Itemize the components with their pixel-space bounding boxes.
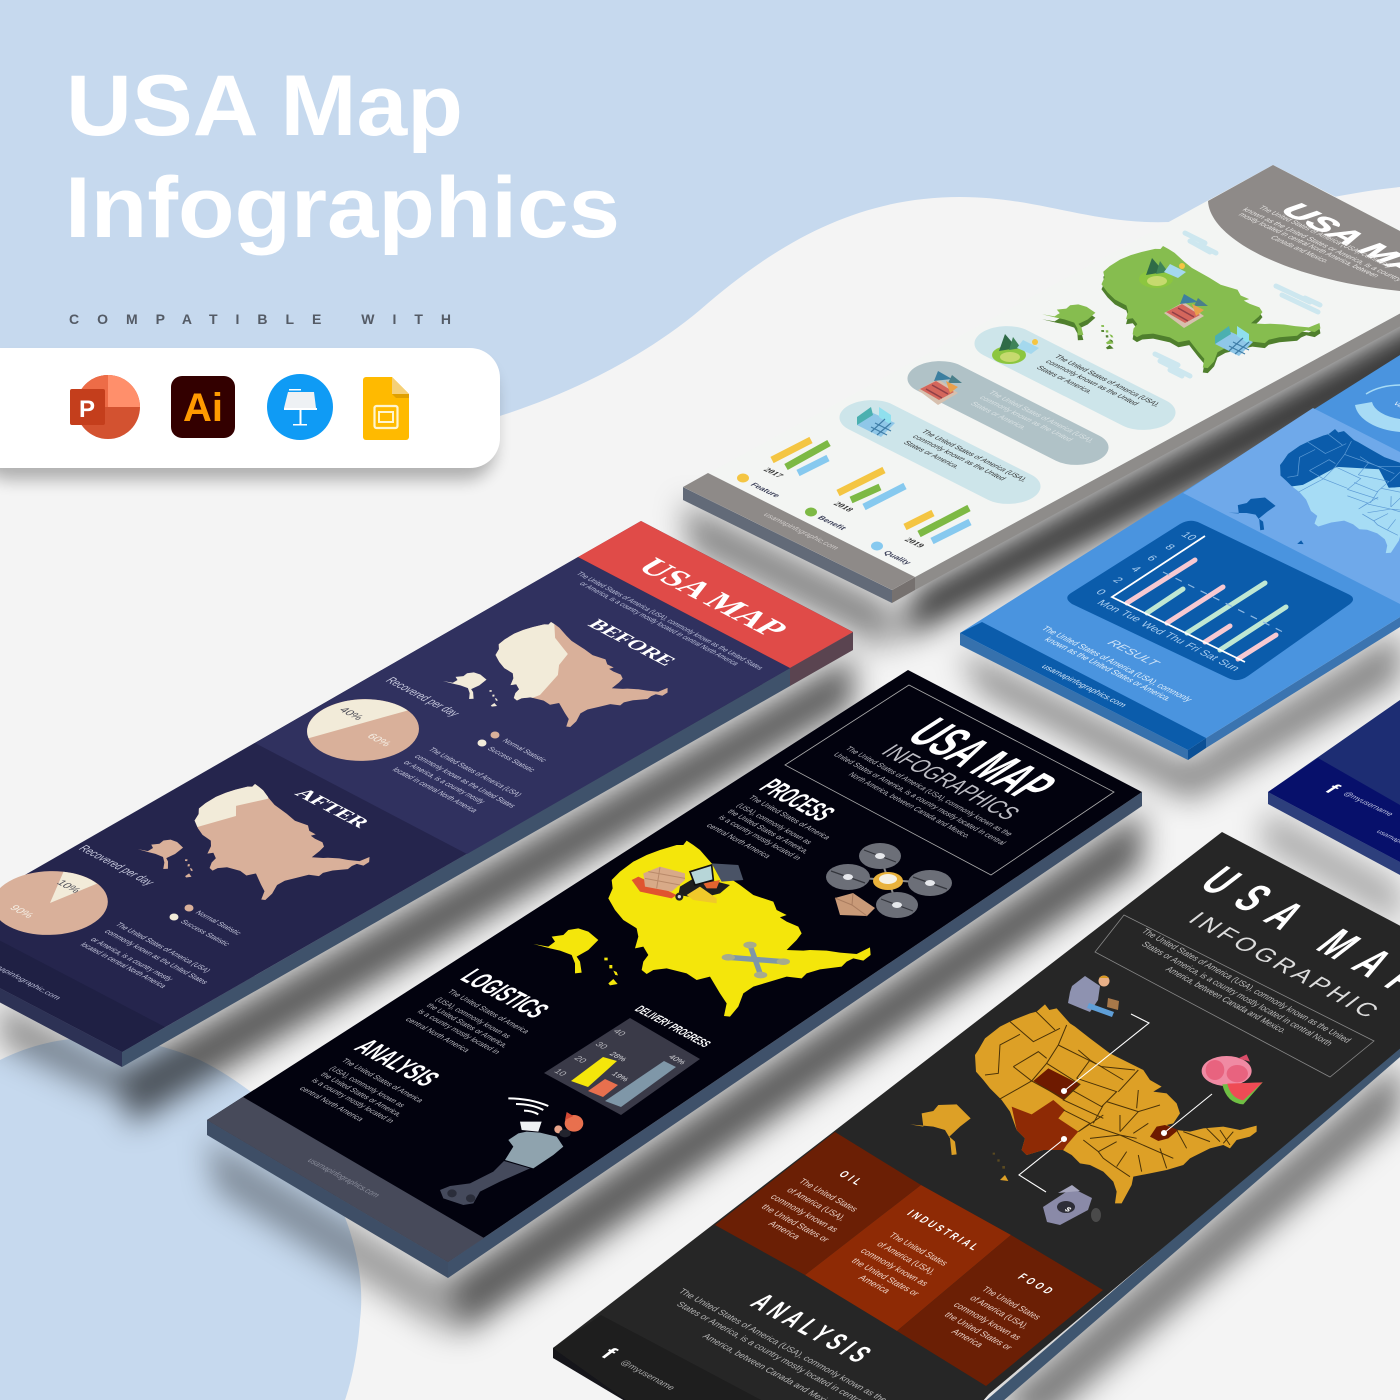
panel: industrial: INDUSTRIAL [904, 1209, 983, 1254]
panel: software icons [0, 348, 500, 468]
intro: United States or America, is a country mostly located in central [831, 751, 1009, 846]
panel: oil: OIL [835, 1170, 867, 1189]
icon: PowerPoint [70, 375, 140, 439]
text: after description: The United States of America (USA) [113, 921, 213, 974]
chart caption: RESULT [1104, 638, 1164, 669]
pill: first feature: The United States of America (USA), [1052, 354, 1163, 408]
icon: worker [1068, 976, 1119, 1017]
text: analysis: the United States or America, [318, 1071, 405, 1118]
bars [1127, 560, 1286, 659]
text: analysis: central North America [297, 1085, 367, 1123]
panel: industrial: the United States or [849, 1257, 921, 1298]
text: logistics: (USA), commonly known as [433, 996, 514, 1040]
bar chart: delivery: 10 [552, 1067, 569, 1077]
intro: The United States of America (USA), commonly known as the United [1139, 927, 1353, 1045]
bar chart: delivery: 19% [609, 1070, 631, 1083]
intro [574, 571, 765, 671]
background: blue blob [0, 1038, 361, 1400]
map: green USA [1037, 243, 1324, 376]
pie chart: before [284, 686, 442, 774]
text: process: The United States of America [746, 794, 833, 841]
text: analysis: The United States of America [339, 1057, 426, 1104]
subtitle: INFOGRAPHIC [1182, 908, 1384, 1022]
axis labels: Wed [1137, 620, 1168, 637]
icon: drone [826, 843, 952, 918]
panel: before and after sheet [0, 521, 853, 1067]
axis labels: 6 [1144, 554, 1159, 563]
intro [831, 745, 1016, 846]
bar chart: yearly: 2019 [902, 536, 928, 549]
text: process: (USA), commonly known as [734, 802, 815, 846]
text: logistics: central North America [403, 1016, 473, 1054]
text: before description: commonly known as the United States [412, 753, 518, 809]
axis labels [1093, 531, 1242, 673]
text: before description: The United States of America (USA) [426, 746, 525, 798]
text: after description: located in central North America [78, 941, 170, 989]
footer url: usamapinfographics.com [1039, 663, 1129, 709]
pill: first feature: commonly known as the United [1043, 359, 1141, 407]
pill: first feature [962, 319, 1188, 437]
legend: chart: Quality [881, 550, 914, 566]
text: after description: or America, is a country mostly [88, 936, 176, 983]
icon: pomegranate and watermelon [1202, 1054, 1263, 1104]
text: logistics: is a country mostly located in [415, 1008, 503, 1055]
subtitle: compatible with: COMPATIBLE WITH [69, 311, 451, 327]
footer band [683, 473, 915, 590]
pill: second feature: The United States of America (USA), [986, 390, 1097, 444]
map: blue USA [1229, 429, 1400, 554]
bar chart: delivery [544, 1018, 700, 1115]
icon: forklift and pallet [632, 863, 743, 903]
intro: The United States of America (USA), commonly known as the United States [574, 571, 765, 671]
header title: USA MAP [629, 554, 796, 643]
axis labels: Sun [1215, 658, 1242, 673]
heading: analysis: ANALYSIS [347, 1035, 446, 1091]
subtitle: INFOGRAPHICS [875, 741, 1025, 824]
intro: States or America, is a country mostly located in central North [1139, 940, 1335, 1048]
axis labels: 2 [1110, 576, 1125, 585]
legend: after: Success Statistic [178, 919, 232, 947]
bar chart: yearly: 2017 [761, 466, 787, 479]
bar chart: yearly [761, 440, 970, 549]
icon: oil can [1043, 1185, 1101, 1225]
panel: green light infographic sheet [683, 165, 1400, 603]
panel: food: America [949, 1328, 986, 1350]
leader lines [1019, 1014, 1212, 1192]
description: The United States of America (USA), commonly [1038, 625, 1195, 704]
panel: food: commonly known as [951, 1301, 1024, 1342]
bar chart: delivery: 40% [666, 1053, 688, 1066]
description: known as the United States or America. [1041, 636, 1174, 703]
bar chart: delivery: 30 [593, 1040, 610, 1050]
pie chart: after: 10% [53, 879, 83, 895]
text: process: central North America [704, 822, 774, 860]
map: states USA [910, 1004, 1257, 1203]
footer url: usamapinfographics.com [305, 1157, 382, 1199]
text: process: is a country mostly located in [716, 814, 804, 861]
map: before [439, 620, 674, 729]
bar chart: yearly: 2018 [831, 500, 857, 513]
pill: second feature: States or America. [968, 401, 1029, 431]
pie chart: before: 60% [364, 732, 394, 748]
heading: process: PROCESS [752, 775, 841, 826]
panel: food: the United States or [942, 1311, 1014, 1352]
axis labels: 10 [1178, 531, 1199, 542]
text: logistics: the United States or America, [424, 1002, 511, 1049]
panel: oil: the United States or [759, 1203, 831, 1244]
icon: PowerPoint: P [79, 396, 95, 423]
panel: oil: commonly known as [768, 1193, 841, 1234]
icon: Keynote [267, 374, 333, 440]
text: logistics: The United States of America [445, 988, 532, 1035]
text: before description: located in central North America [390, 766, 481, 814]
text: analysis: is a country mostly located in [309, 1077, 397, 1124]
map icons [1139, 258, 1253, 356]
panel: food: of America (USA), [967, 1294, 1031, 1331]
panel: charcoal industry sheet [553, 832, 1400, 1400]
header: red [578, 521, 853, 668]
bar chart: delivery: 20 [572, 1054, 589, 1064]
panel: industrial: of America (USA), [874, 1240, 938, 1277]
footer band [207, 1097, 484, 1262]
panel: oil: The United States [796, 1177, 860, 1214]
icon: Google Slides [363, 377, 409, 440]
title: USA MAP [894, 710, 1069, 810]
panel: black logistics sheet [207, 670, 1142, 1278]
icon: person with tablet [440, 1098, 583, 1205]
donut chart [1355, 385, 1400, 432]
pill: third feature: States or America. [901, 440, 962, 470]
footer band [1268, 758, 1400, 862]
panel: food: FOOD [1014, 1272, 1058, 1298]
panel: oil: of America (USA), [784, 1186, 848, 1223]
panel: food [897, 1235, 1103, 1386]
intro: America, between Canada and Mexico. [1163, 965, 1289, 1035]
legend: before: Success Statistic [485, 746, 537, 773]
icon: oil can: $ [1062, 1206, 1074, 1214]
icon: Illustrator: Ai [183, 386, 223, 430]
title [65, 58, 620, 256]
pie chart: before: 40% [336, 706, 366, 722]
footer band [0, 916, 165, 1052]
axis labels: 0 [1093, 588, 1108, 597]
panel: oil: America [766, 1220, 803, 1242]
title frame [785, 685, 1114, 875]
intro frame [1095, 915, 1374, 1077]
text: analysis: (USA), commonly known as [327, 1065, 408, 1109]
axis labels: Thu [1161, 631, 1188, 646]
section: before [255, 557, 790, 854]
legend: before [478, 732, 549, 773]
social handle: @myusername [1341, 790, 1396, 818]
legend: before: Normal Statistic [500, 738, 549, 763]
panel: industrial: commonly known as [858, 1247, 931, 1288]
icon: facebook: f [1320, 782, 1344, 797]
legend: chart: Benefit [815, 515, 849, 531]
heading: logistics: LOGISTICS [453, 965, 556, 1023]
header description: Canada and Mexico. [1268, 235, 1332, 264]
text: after description [78, 921, 213, 989]
header shape [1208, 165, 1400, 291]
text: after description: commonly known as the United States [102, 928, 211, 985]
icon: Illustrator [171, 376, 235, 438]
heading: before: BEFORE [583, 617, 681, 669]
band: footer [960, 622, 1206, 750]
pill: second feature: commonly known as the United [977, 395, 1075, 443]
panel: blue infographic sheet [960, 355, 1400, 760]
pill: third feature [827, 393, 1053, 511]
text: process [704, 794, 833, 861]
intro: The United States of America (USA), commonly known as the [843, 745, 1016, 838]
panel: industrial [805, 1185, 1011, 1331]
title: USA Map [66, 58, 463, 154]
axis labels: Sat [1196, 649, 1221, 662]
axis labels: 8 [1162, 543, 1177, 552]
panel shadow [0, 362, 495, 480]
heading: after: AFTER [290, 786, 375, 831]
pill: third feature: commonly known as the United [910, 434, 1008, 482]
bar chart: delivery: 40 [611, 1027, 628, 1037]
icon: facebook: f [596, 1344, 623, 1363]
panel: oil [715, 1132, 921, 1275]
label: recovered per day: Recovered per day [382, 675, 464, 718]
axis labels: Mon [1094, 598, 1123, 614]
panel: food: The United States [979, 1285, 1043, 1322]
icon: small drone on map [722, 942, 790, 978]
pie chart: after: 90% [6, 904, 36, 920]
map: yellow USA [533, 841, 871, 1017]
pill: second feature [895, 354, 1121, 472]
legend: chart [737, 474, 914, 566]
intro: North America, between Canada and Mexico. [846, 771, 974, 840]
text: logistics [403, 988, 532, 1055]
band: map section [1183, 408, 1400, 604]
decorative clouds [1155, 233, 1320, 376]
social handle: @myusername [618, 1358, 677, 1392]
bar chart: delivery: 28% [607, 1050, 629, 1063]
legend: after [170, 904, 244, 947]
text: before description [390, 746, 525, 814]
pill: first feature: States or America. [1034, 365, 1095, 395]
text: process: the United States or America, [725, 808, 812, 855]
panel: industrial: America [856, 1274, 893, 1296]
text: before description: or America, is a country mostly [401, 759, 488, 805]
pill: third feature: The United States of America (USA), [919, 429, 1030, 483]
heading: delivery progress: DELIVERY PROGRESS [631, 1004, 715, 1049]
axis labels: Tue [1117, 609, 1144, 624]
intro [1139, 927, 1353, 1048]
legend: after: Normal Statistic [193, 910, 244, 936]
panel: navy sheet edge [1268, 700, 1400, 875]
axis labels: Fri [1182, 641, 1203, 653]
axis labels: 4 [1128, 565, 1143, 574]
panel: industrial: The United States [886, 1231, 950, 1268]
label: recovered per day: Recovered per day [75, 843, 159, 887]
text: analysis [297, 1057, 426, 1124]
title: Infographics [65, 160, 620, 256]
header description: mostly located in central North America, between [1236, 212, 1382, 279]
map: after [130, 781, 382, 902]
chart panel: weekly bars [1067, 521, 1353, 680]
legend: chart: Feature [748, 482, 783, 499]
heading: analysis: ANALYSIS [743, 1289, 882, 1370]
pie chart: after [0, 858, 132, 948]
sheet shadows [0, 285, 1400, 1400]
intro: or America, is a country mostly located in central North America [577, 581, 741, 667]
footer band [553, 1315, 780, 1400]
footer url: usamapinfographic.com [761, 512, 841, 551]
